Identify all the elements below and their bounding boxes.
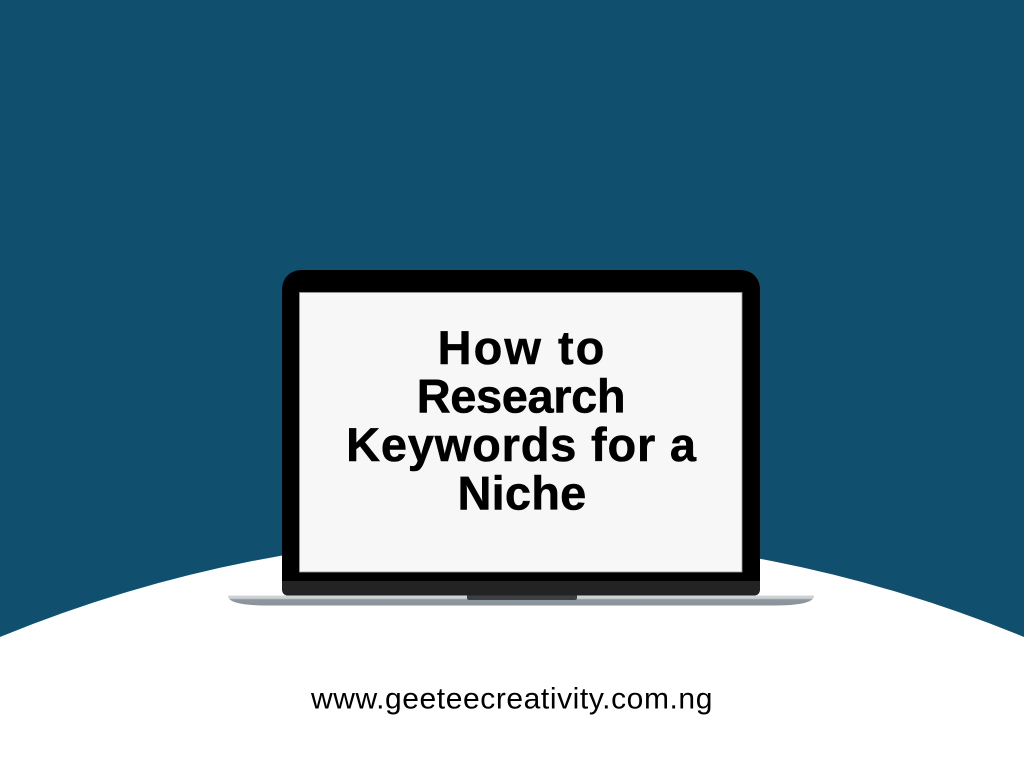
laptop bottom bezel	[282, 581, 760, 596]
title: Niche	[458, 466, 586, 520]
laptop base	[228, 596, 814, 606]
title: Keywords for a	[346, 418, 697, 471]
title: Research	[417, 370, 625, 422]
website url: www.geeteecreativity.com.ng	[310, 682, 713, 716]
icon: laptop	[228, 270, 814, 606]
title: How to	[438, 321, 606, 374]
white curved ground	[0, 536, 1024, 768]
title	[346, 321, 697, 520]
laptop notch	[467, 596, 577, 600]
laptop screen	[300, 292, 742, 572]
laptop lid	[282, 270, 760, 596]
